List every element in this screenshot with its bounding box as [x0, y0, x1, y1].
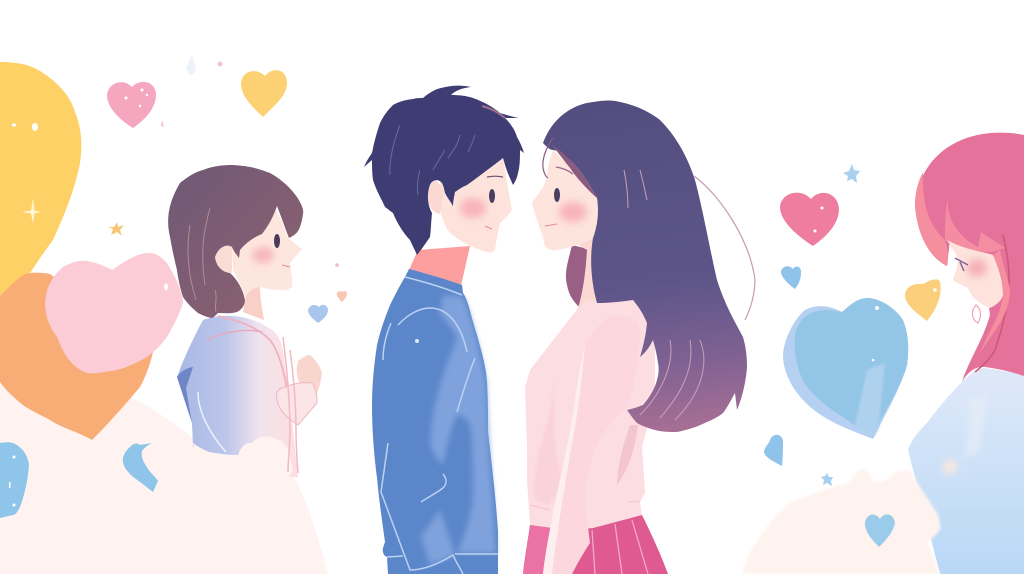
- heart: pink right: [780, 193, 839, 246]
- heart: blue bottom right: [865, 514, 895, 547]
- large pale pink heart: [45, 253, 183, 373]
- girl blouse: [525, 300, 655, 529]
- girl neck: [570, 235, 600, 308]
- girl hair: [543, 100, 747, 432]
- child hoodie: [177, 316, 298, 477]
- heart: small blue centre: [308, 305, 328, 323]
- sparkles: [108, 55, 860, 486]
- girl skirt: [523, 515, 668, 574]
- boy: [364, 86, 524, 574]
- heart: small blue right: [781, 266, 801, 289]
- heart: pink top left: [107, 82, 156, 128]
- heart: large blue right: [783, 298, 908, 439]
- boy ear: [428, 180, 444, 214]
- right girl hoodie: [908, 368, 1024, 574]
- bottom right cloud: [742, 469, 940, 574]
- child face: [232, 207, 302, 320]
- child ear: [215, 246, 232, 273]
- boy face: [440, 158, 512, 253]
- boy neck: [409, 246, 470, 290]
- boy hair: [364, 86, 524, 255]
- heart: tiny peach centre: [337, 291, 347, 302]
- child hoodie tie: [283, 337, 298, 473]
- right girl tear: [972, 305, 980, 323]
- girl arm: [543, 315, 640, 574]
- large yellow heart: [0, 62, 81, 296]
- bottom left cloud: [0, 382, 328, 574]
- boy sweater: [372, 269, 498, 574]
- large orange heart: [0, 273, 153, 440]
- child sleeve cuff: [277, 383, 317, 425]
- heart: small yellow right: [905, 279, 941, 321]
- child hair: [168, 165, 303, 318]
- heart: small blue lower: [764, 435, 783, 466]
- girl back lock: [566, 245, 592, 308]
- girl on the right: [908, 133, 1024, 574]
- girl face: [532, 150, 602, 250]
- child hand: [297, 355, 322, 396]
- right girl hair lock: [975, 250, 1010, 362]
- heart: blue bottom left: [0, 442, 29, 518]
- girl: [523, 100, 755, 574]
- heart: yellow top: [241, 70, 287, 117]
- girl stray hair strand: [694, 176, 755, 320]
- cloud puff over hoodie hem: [193, 436, 293, 490]
- child girl on the left: [168, 165, 322, 477]
- right girl face: [947, 240, 1003, 308]
- right girl hair: [915, 133, 1024, 382]
- crescent: blue bottom left: [123, 443, 158, 492]
